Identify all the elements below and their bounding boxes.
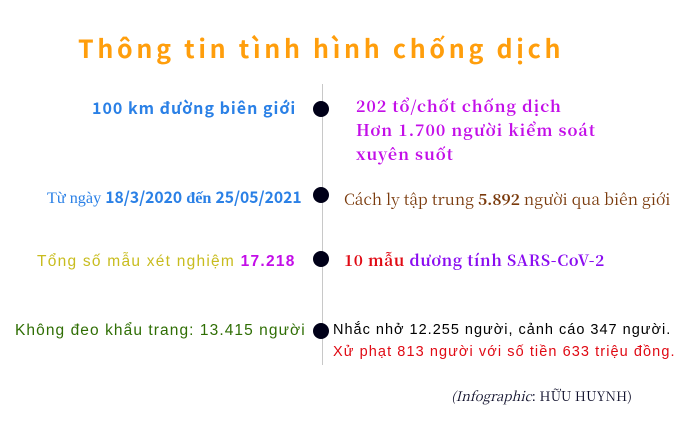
right text: checkpoints: Hơn 1.700 người kiểm soát: [356, 118, 596, 141]
title: Thông tin tình hình chống dịch: [78, 30, 564, 66]
timeline dot 3: [313, 251, 329, 267]
credit: (Infographic: HỮU HUYNH): [451, 386, 632, 405]
left text: no masks: Không đeo khẩu trang: 13.415 người: [15, 322, 306, 339]
left text: test samples: Tổng số mẫu xét nghiệm 17.218: [37, 253, 296, 270]
timeline dot 1: [313, 101, 329, 117]
left text: date range: Từ ngày 18/3/2020 đến 25/05/2021: [47, 185, 302, 208]
left text: border length: 100 km đường biên giới: [92, 95, 296, 119]
right text: checkpoints: 202 tổ/chốt chống dịch: [356, 94, 562, 117]
timeline axis: [322, 84, 323, 365]
right text: reminders: Nhắc nhở 12.255 người, cảnh cáo 347 người.: [333, 322, 671, 338]
right text: checkpoints: [356, 94, 596, 165]
right text: checkpoints: xuyên suốt: [356, 142, 454, 165]
timeline dot 4: [313, 323, 329, 339]
right text: fines: Xử phạt 813 người với số tiền 633 triệu đồng.: [333, 344, 676, 360]
right text: positive samples: 10 mẫu dương tính SARS-CoV-2: [344, 249, 605, 271]
timeline dot 2: [313, 187, 329, 203]
right text: quarantine: Cách ly tập trung 5.892 người qua biên giới: [344, 188, 670, 210]
